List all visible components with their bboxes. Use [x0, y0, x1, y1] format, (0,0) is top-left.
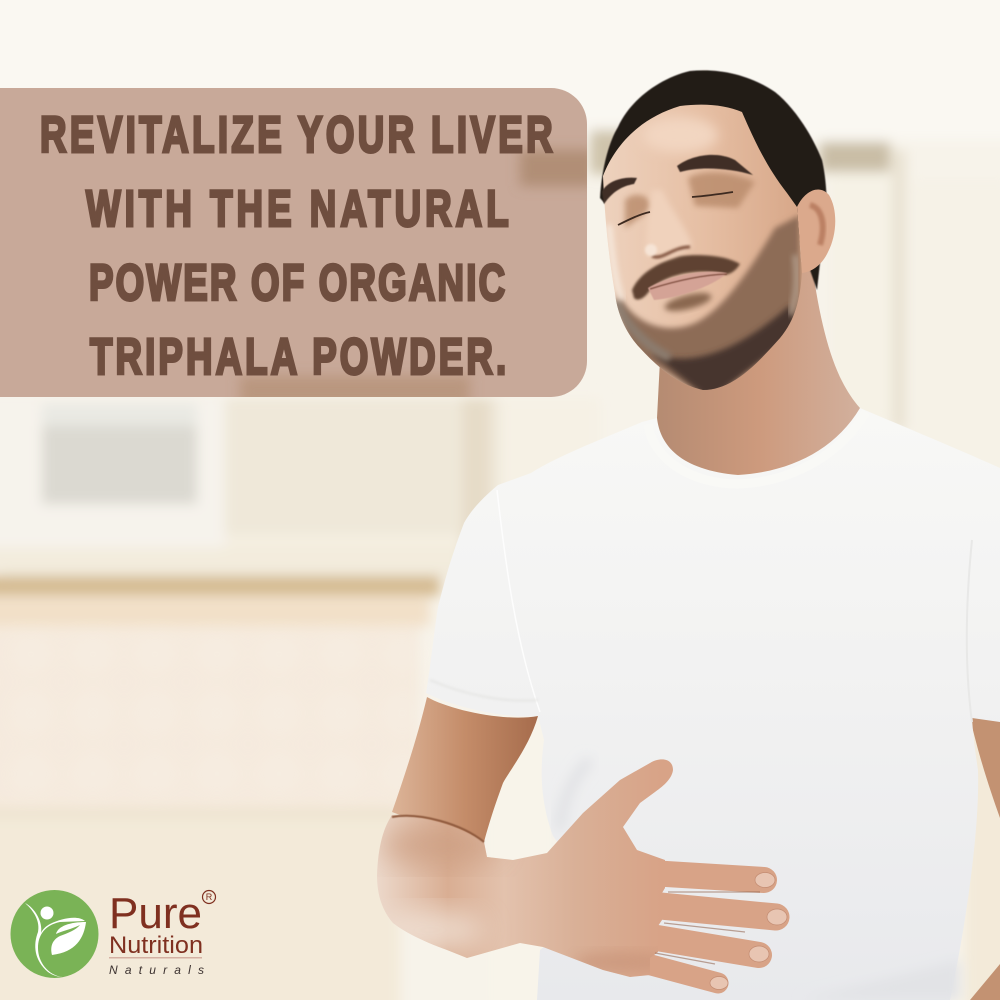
mustache [632, 255, 740, 300]
finger gaps [655, 892, 760, 964]
forehead highlight [642, 117, 718, 153]
heading: main message: TRIPHALA POWDER. [90, 329, 506, 385]
heading: main message: WITH THE NATURAL [86, 181, 509, 237]
lips [648, 272, 727, 300]
elbow crease [392, 816, 484, 842]
right arm behind shirt [970, 718, 1000, 1000]
left cheek highlight [609, 225, 622, 300]
forearm and back of hand [377, 759, 673, 977]
neck [657, 260, 860, 475]
nose [645, 190, 692, 258]
fingers [640, 873, 776, 983]
eye sockets [625, 172, 755, 228]
fingernails [710, 872, 787, 990]
soul patch [663, 289, 713, 315]
ear [797, 189, 835, 273]
wordmark: Nutrition [109, 932, 203, 959]
wordmark: R [206, 892, 213, 902]
brand logo [10, 889, 216, 978]
wordmark [109, 889, 216, 977]
bent arm and hand [370, 697, 787, 990]
chin grey patches [616, 300, 670, 358]
icon: green leaf circle [10, 890, 98, 978]
heading: main message: REVITALIZE YOUR LIVER [40, 107, 553, 163]
white t-shirt [426, 408, 1000, 1000]
jaw dark layer [652, 304, 795, 390]
face [603, 104, 802, 390]
shirt shading [430, 490, 972, 1000]
closed eyes [618, 192, 733, 225]
eyebrows [602, 155, 753, 204]
upper arm [392, 697, 538, 842]
man photo illustration [370, 70, 1000, 1000]
panel: headline background [0, 88, 595, 406]
heading: main message: POWER OF ORGANIC [89, 255, 505, 311]
collar [648, 412, 866, 484]
wordmark: Pure [109, 889, 202, 938]
heading: main message [40, 107, 553, 385]
hair [600, 70, 827, 290]
wordmark: Naturals [109, 963, 204, 977]
beard mid layer [615, 215, 800, 400]
